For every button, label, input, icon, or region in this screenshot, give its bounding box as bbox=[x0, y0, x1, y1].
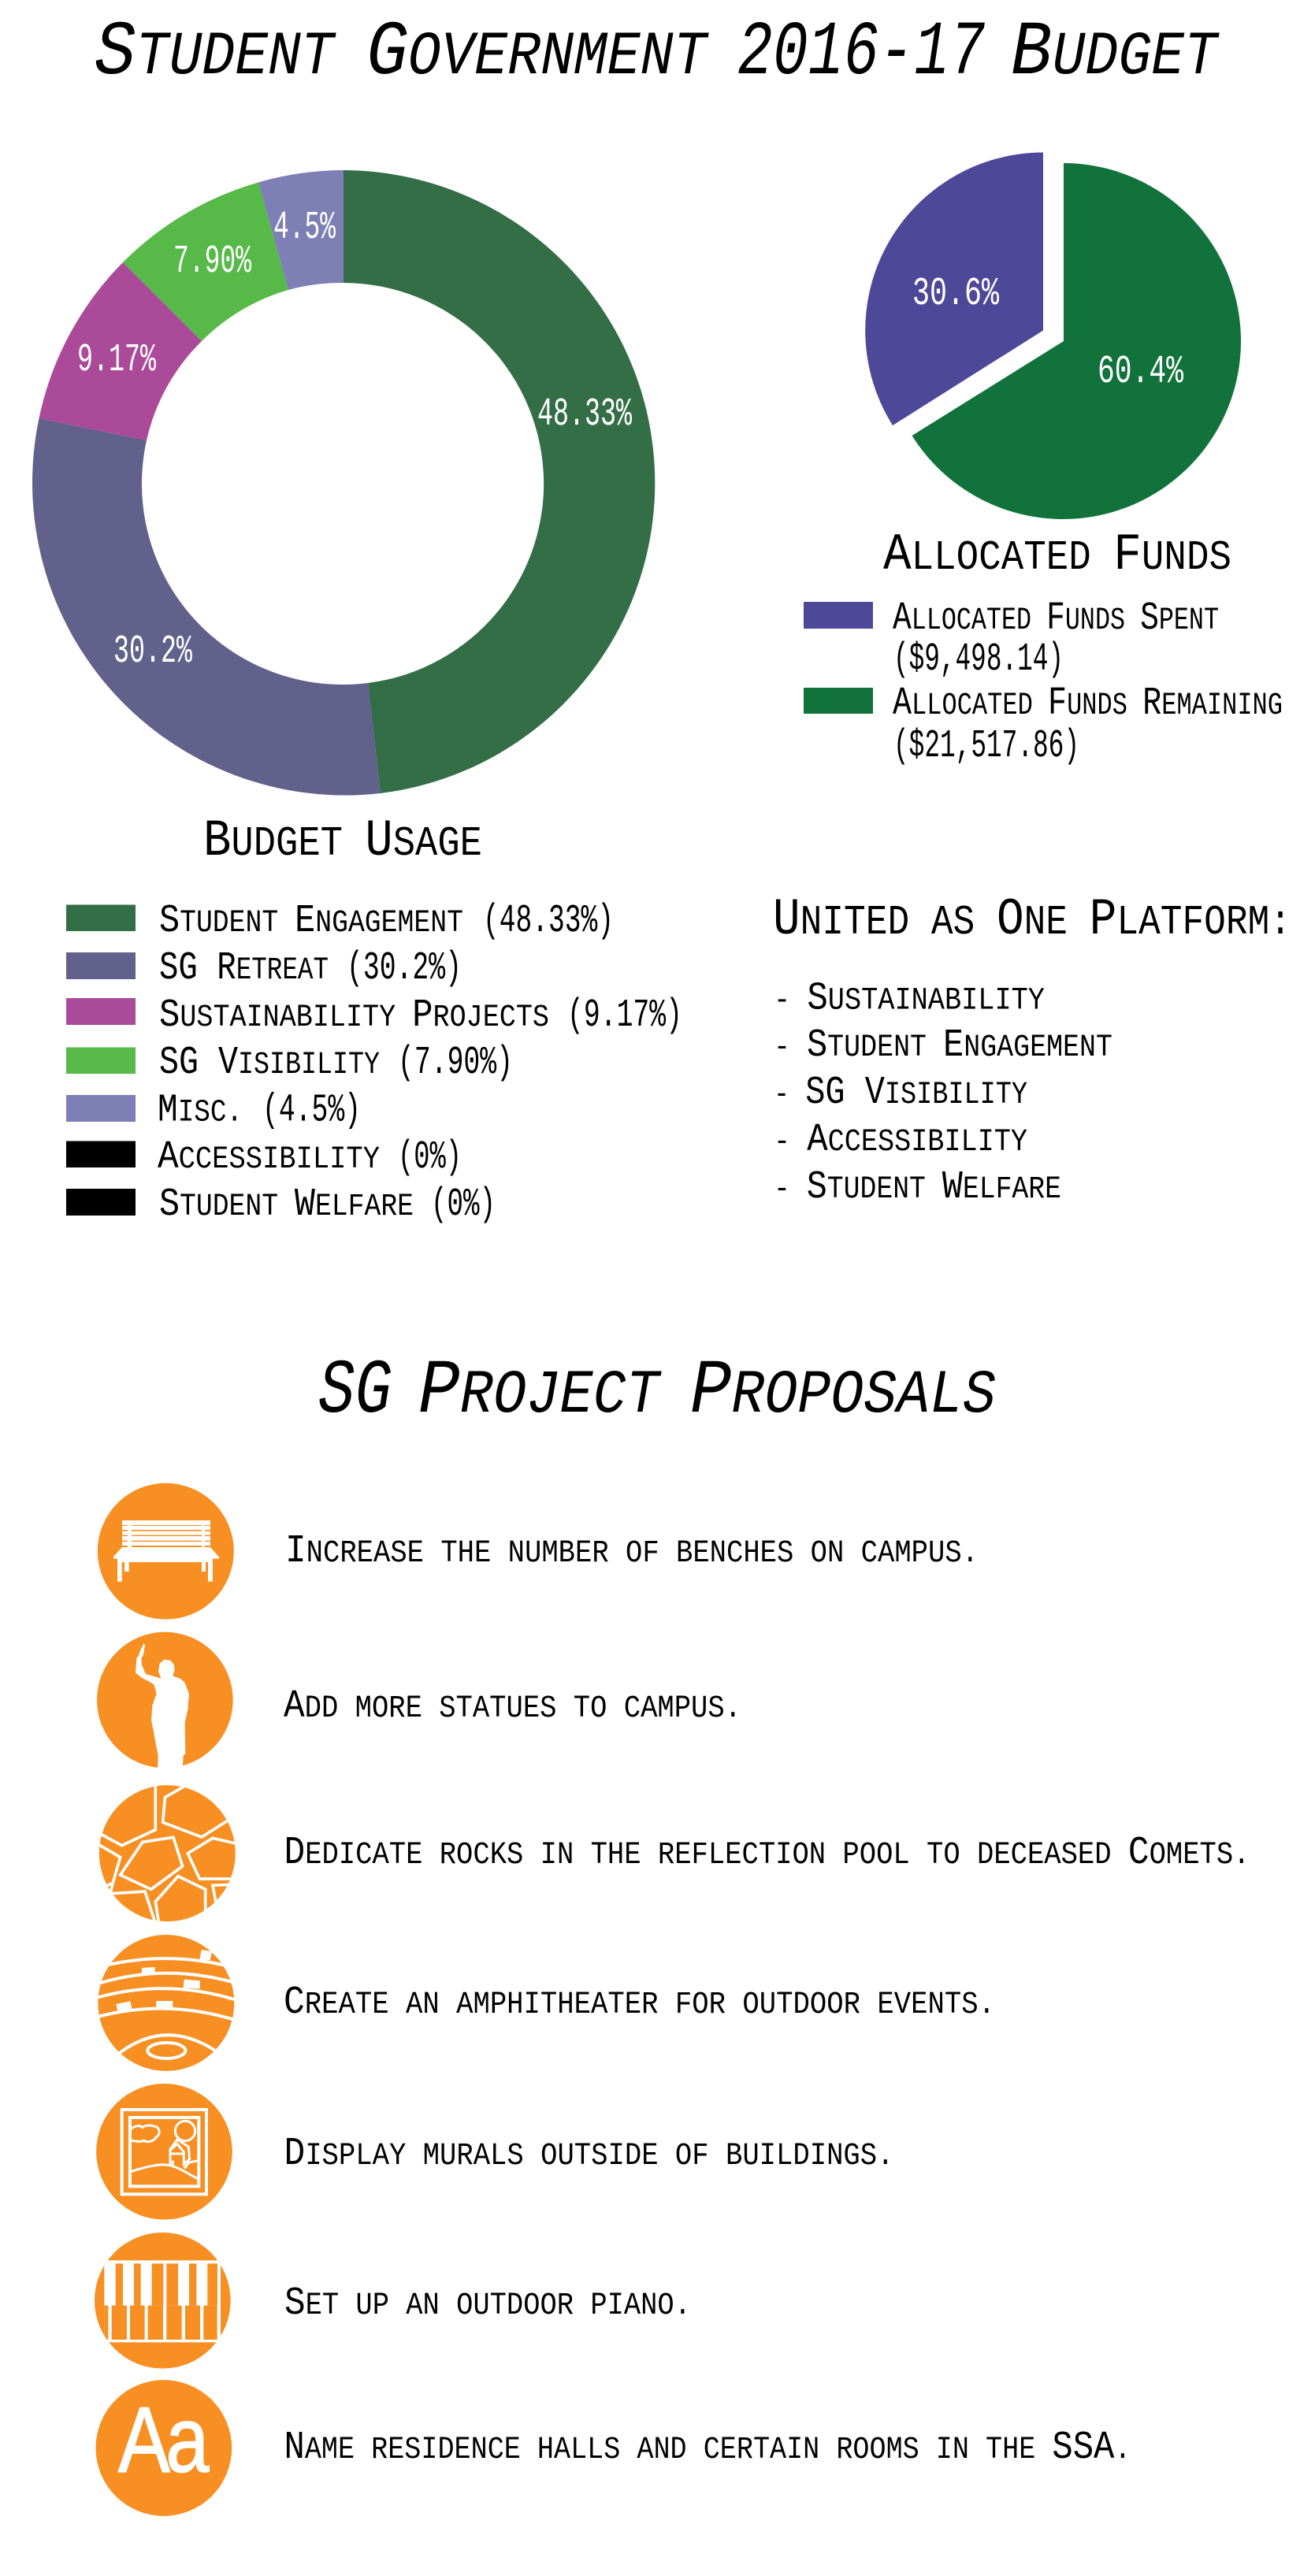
legend text: spent: ALLOCATED FUNDS SPENT bbox=[893, 596, 1219, 641]
slice: SG Visibility bbox=[123, 183, 288, 341]
title: STUDENT bbox=[95, 10, 336, 97]
value label: 48.33%: 48.33% bbox=[537, 392, 633, 437]
value label: 7.90%: 7.90% bbox=[173, 239, 252, 284]
slice: Misc bbox=[258, 170, 344, 290]
legend text: Accessibility: (0%) bbox=[398, 1135, 462, 1180]
title: GOVERNMENT bbox=[366, 10, 709, 97]
legend: allocated funds bbox=[804, 596, 1283, 769]
legend text: SG Visibility: SG VISIBILITY bbox=[159, 1041, 380, 1086]
legend text: SG Retreat: (30.2%) bbox=[347, 946, 462, 991]
swatch: Accessibility bbox=[66, 1141, 136, 1167]
heading: SG Project Proposals: PROJECT bbox=[418, 1349, 662, 1435]
value label: 9.17%: 9.17% bbox=[77, 338, 157, 383]
swatch: Student Engagement bbox=[66, 904, 136, 931]
list item: Accessibility: - ACCESSIBILITY bbox=[774, 1118, 1027, 1163]
legend text: Student Engagement: (48.33%) bbox=[483, 899, 614, 944]
slice: SG Retreat bbox=[32, 418, 381, 796]
icon: typography Aa bbox=[95, 2380, 232, 2516]
proposal text: piano: SET UP AN OUTDOOR PIANO. bbox=[284, 2281, 691, 2326]
title: BUDGET bbox=[1011, 10, 1220, 97]
proposal text: amphitheater: CREATE AN AMPHITHEATER FOR OUTDOOR EVENTS. bbox=[284, 1980, 995, 2025]
value label: 30.6%: 30.6% bbox=[912, 272, 1000, 317]
icon: bench bbox=[98, 1483, 234, 1620]
heading: SG Project Proposals bbox=[318, 1349, 996, 1435]
icon: piano keys bbox=[95, 2233, 231, 2369]
list item: Student Engagement: - STUDENT ENGAGEMENT bbox=[774, 1023, 1112, 1068]
legend: budget usage bbox=[66, 899, 682, 1227]
heading: Budget Usage: BUDGET USAGE bbox=[203, 811, 482, 870]
value label: 60.4%: 60.4% bbox=[1098, 350, 1184, 395]
pie chart: allocated funds bbox=[865, 153, 1241, 519]
swatch: Student Welfare bbox=[66, 1189, 136, 1216]
swatch: remaining bbox=[804, 688, 873, 714]
legend text: Misc: (4.5%) bbox=[262, 1089, 361, 1133]
list item: SG Visibility: - SG VISIBILITY bbox=[774, 1071, 1027, 1115]
donut chart: budget usage bbox=[32, 170, 655, 796]
list item: Sustainability: - SUSTAINABILITY bbox=[774, 977, 1045, 1021]
legend text: SG Visibility: (7.90%) bbox=[398, 1041, 513, 1086]
swatch: SG Retreat bbox=[66, 952, 136, 979]
proposal text: statues: ADD MORE STATUES TO CAMPUS. bbox=[284, 1684, 741, 1729]
heading: Allocated Funds: ALLOCATED FUNDS bbox=[883, 525, 1231, 585]
heading: SG Project Proposals: PROPOSALS bbox=[690, 1349, 996, 1435]
swatch: spent bbox=[804, 602, 873, 629]
title bbox=[95, 10, 1220, 97]
slice: funds remaining bbox=[912, 163, 1241, 519]
icon: amphitheater bbox=[95, 1935, 238, 2071]
legend amount: spent: ($9,498.14) bbox=[893, 637, 1064, 682]
heading: SG Project Proposals: SG bbox=[318, 1349, 392, 1435]
icon: statue bbox=[97, 1632, 233, 1771]
proposal text: rocks: DEDICATE ROCKS IN THE REFLECTION POOL TO DECEASED COMETS. bbox=[284, 1831, 1250, 1876]
legend text: SG Retreat bbox=[159, 946, 462, 991]
proposal text: benches: INCREASE THE NUMBER OF BENCHES ON CAMPUS. bbox=[285, 1529, 979, 1574]
legend text: Student Engagement: STUDENT ENGAGEMENT bbox=[159, 899, 463, 944]
title: 2016-17 bbox=[737, 10, 985, 97]
icon: typography Aa: Aa bbox=[118, 2389, 210, 2492]
panel: United as One Platform bbox=[773, 890, 1291, 1210]
legend amount: remaining: ($21,517.86) bbox=[893, 724, 1079, 769]
legend text: SG Retreat: SG RETREAT bbox=[159, 946, 329, 991]
swatch: Sustainability Projects bbox=[66, 998, 136, 1025]
legend text: Accessibility: ACCESSIBILITY bbox=[158, 1135, 380, 1180]
legend text: Student Welfare: (0%) bbox=[431, 1182, 496, 1227]
list item: Student Welfare: - STUDENT WELFARE bbox=[774, 1165, 1061, 1210]
icon: mural bbox=[96, 2084, 232, 2220]
slice: Student Engagement bbox=[344, 170, 655, 793]
legend text: Misc: MISC. bbox=[158, 1089, 243, 1133]
value label: 30.2%: 30.2% bbox=[113, 629, 193, 674]
swatch: SG Visibility bbox=[66, 1048, 136, 1074]
legend text: Sustainability Projects: SUSTAINABILITY PROJECTS bbox=[159, 993, 549, 1038]
slice: funds spent bbox=[865, 153, 1043, 425]
swatch: Misc bbox=[66, 1095, 136, 1122]
proposal text: residence halls: NAME RESIDENCE HALLS AND CERTAIN ROOMS IN THE SSA. bbox=[284, 2426, 1131, 2470]
slice: Sustainability Projects bbox=[39, 262, 202, 440]
proposal text: murals: DISPLAY MURALS OUTSIDE OF BUILDINGS. bbox=[284, 2132, 893, 2177]
value label: 4.5%: 4.5% bbox=[273, 206, 336, 251]
legend text: Sustainability Projects: (9.17%) bbox=[567, 993, 682, 1038]
legend text: Misc bbox=[158, 1089, 361, 1133]
icon: reflection pool rocks bbox=[96, 1783, 238, 1924]
legend text: Student Welfare: STUDENT WELFARE bbox=[159, 1182, 414, 1227]
